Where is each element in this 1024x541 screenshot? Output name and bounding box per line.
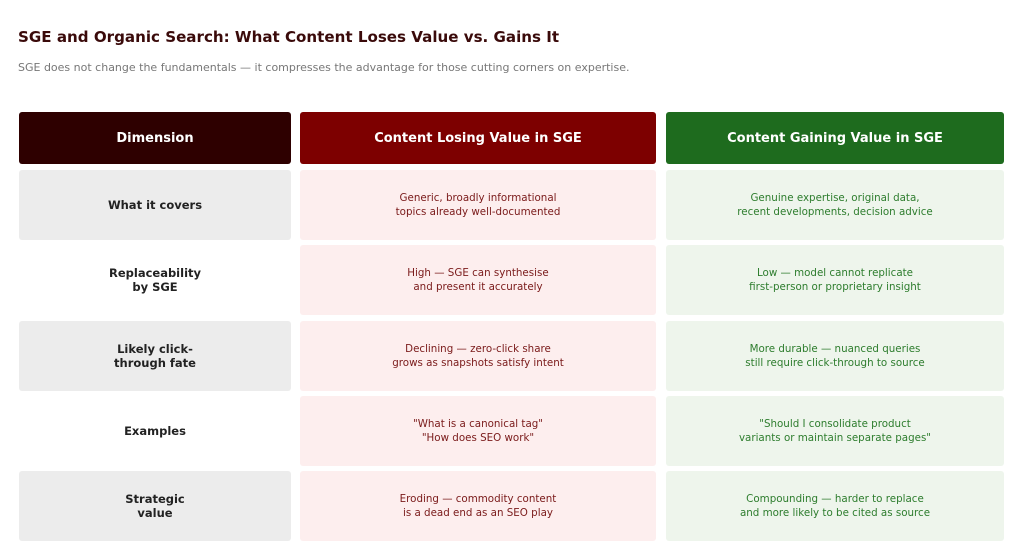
table: and present it accurately xyxy=(413,281,543,293)
table: variants or maintain separate pages" xyxy=(739,432,931,444)
table: first-person or proprietary insight xyxy=(749,281,921,293)
row: click-through: Likely click- xyxy=(117,342,193,356)
header: gaining xyxy=(666,112,1004,164)
header: dimension xyxy=(19,112,291,164)
row: strategic value xyxy=(19,471,291,541)
row: click-through xyxy=(19,321,291,391)
table: "Should I consolidate product xyxy=(759,418,911,430)
row: what it covers xyxy=(19,170,291,240)
table: is a dead end as an SEO play xyxy=(403,507,553,519)
table: Eroding — commodity content xyxy=(400,493,556,505)
row: replaceability xyxy=(109,266,201,294)
table: Genuine expertise, original data, xyxy=(750,192,920,204)
table: and more likely to be cited as source xyxy=(740,507,930,519)
table: More durable — nuanced queries xyxy=(750,343,920,355)
subtitle: SGE does not change the fundamentals — it compresses the advantage for those cutting corners on expertise. xyxy=(18,61,629,74)
title: SGE and Organic Search: What Content Loses Value vs. Gains It xyxy=(18,28,559,46)
row: click-through: through fate xyxy=(114,356,196,370)
header: losing xyxy=(300,112,656,164)
header: losing: Content Losing Value in SGE xyxy=(374,131,582,146)
table: recent developments, decision advice xyxy=(737,206,933,218)
table: grows as snapshots satisfy intent xyxy=(392,357,564,369)
row: examples: Examples xyxy=(124,424,186,438)
table: "How does SEO work" xyxy=(422,432,534,444)
row: replaceability: by SGE xyxy=(132,280,178,294)
row: what it covers: What it covers xyxy=(108,198,202,212)
header: gaining: Content Gaining Value in SGE xyxy=(727,131,943,146)
table: topics already well-documented xyxy=(396,206,560,218)
table: "What is a canonical tag" xyxy=(413,418,543,430)
row: replaceability: Replaceability xyxy=(109,266,201,280)
row: strategic value: value xyxy=(137,506,173,520)
table: Declining — zero-click share xyxy=(405,343,551,355)
table: Low — model cannot replicate xyxy=(757,267,913,279)
table: Compounding — harder to replace xyxy=(746,493,924,505)
table: High — SGE can synthesise xyxy=(407,267,549,279)
table: still require click-through to source xyxy=(745,357,925,369)
table: Generic, broadly informational xyxy=(400,192,556,204)
row: strategic value: Strategic xyxy=(125,492,185,506)
header: dimension: Dimension xyxy=(116,131,194,146)
